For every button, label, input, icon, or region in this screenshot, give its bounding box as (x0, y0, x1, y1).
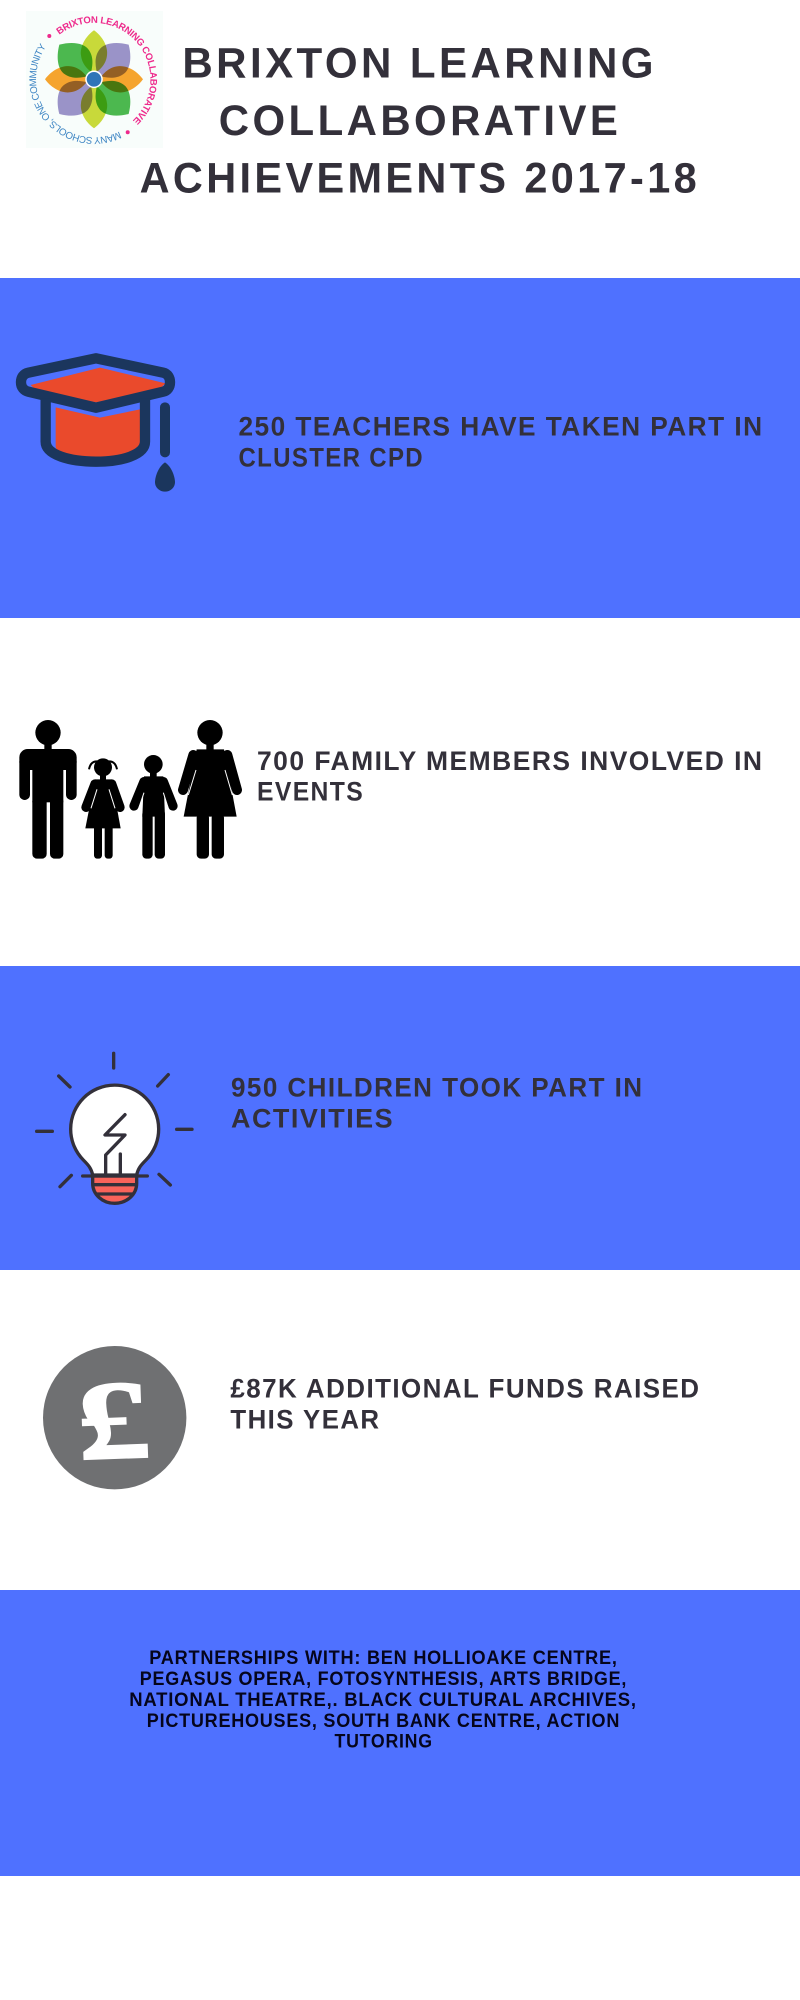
text: funds raised: THIS YEAR (230, 1405, 380, 1435)
panel: children (0, 966, 800, 1270)
title (140, 39, 700, 203)
text: partnerships: PEGASUS OPERA, FOTOSYNTHESIS, ARTS BRIDGE, (140, 1669, 627, 1690)
logo: Brixton Learning Collaborative (29, 16, 158, 144)
text: teachers (238, 412, 764, 473)
text: funds raised: £87K ADDITIONAL FUNDS RAISED (230, 1374, 700, 1404)
text: family members (257, 746, 764, 806)
title: BRIXTON LEARNING (182, 39, 657, 87)
text: partnerships (129, 1648, 637, 1753)
text: partnerships: PICTUREHOUSES, SOUTH BANK CENTRE, ACTION (147, 1711, 620, 1732)
text: family members: EVENTS (257, 776, 364, 806)
icon: graduation cap (21, 358, 175, 492)
text: children: 950 CHILDREN TOOK PART IN (231, 1073, 644, 1103)
text: family members: 700 FAMILY MEMBERS INVOLVED IN (257, 746, 764, 776)
icon: light bulb (37, 1053, 192, 1203)
text: partnerships: TUTORING (334, 1732, 433, 1753)
text: children (231, 1073, 644, 1134)
text: teachers: 250 TEACHERS HAVE TAKEN PART IN (238, 412, 764, 442)
text: teachers: CLUSTER CPD (238, 443, 424, 473)
text: children: ACTIVITIES (231, 1104, 394, 1134)
title: ACHIEVEMENTS 2017-18 (140, 155, 700, 203)
text: partnerships: PARTNERSHIPS WITH: BEN HOLLIOAKE CENTRE, (149, 1648, 618, 1669)
text: partnerships: NATIONAL THEATRE,. BLACK CULTURAL ARCHIVES, (129, 1690, 637, 1711)
icon: pound coin: £ (75, 1358, 152, 1484)
logo: Brixton Learning Collaborative: BRIXTON LEARNING COLLABORATIVE (56, 16, 158, 125)
title: COLLABORATIVE (219, 97, 621, 145)
panel: partnerships (0, 1590, 800, 1876)
icon: family silhouettes (19, 720, 237, 859)
text: funds raised (230, 1374, 700, 1435)
panel: teachers (0, 278, 800, 618)
logo: Brixton Learning Collaborative: MANY SCHOOLS, ONE COMMUNITY (29, 43, 122, 144)
icon: pound coin (43, 1346, 186, 1489)
